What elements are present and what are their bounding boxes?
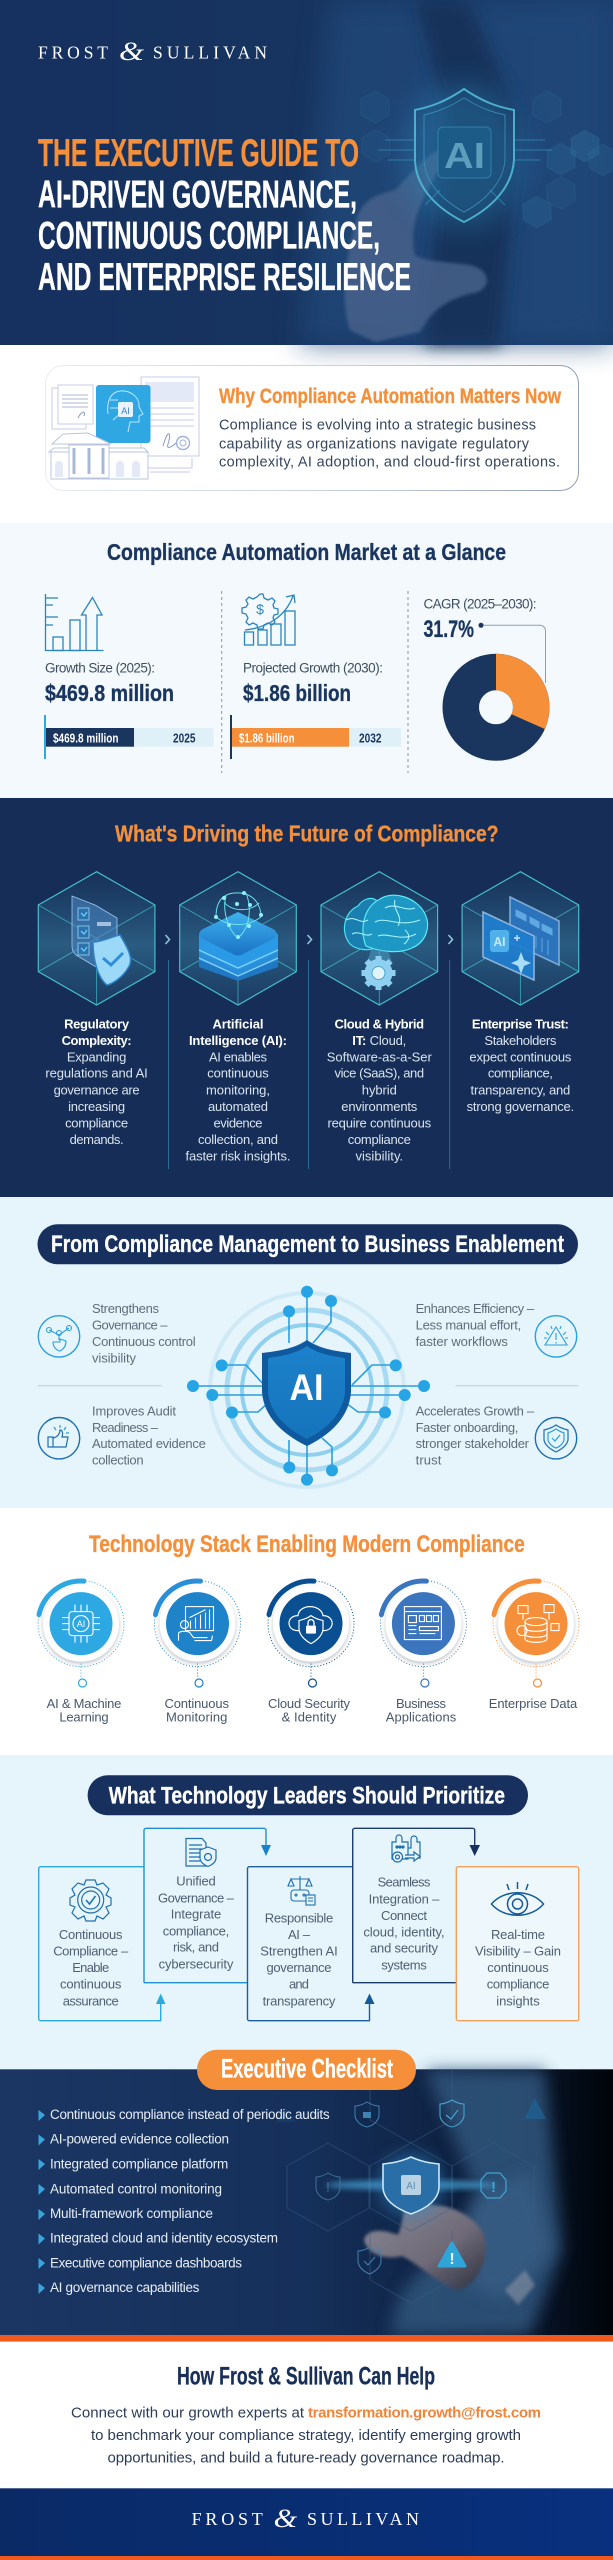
text: accelerates growth <box>416 1403 535 1468</box>
illustration: documents, AI head and building <box>49 377 199 479</box>
pill: executive checklist heading: Executive Checklist <box>221 2053 393 2083</box>
step: seamless integration: Connect <box>381 1908 427 1923</box>
step: unified governance: compliance, <box>163 1923 229 1938</box>
text: strengthens governance <box>92 1301 196 1366</box>
text: enterprise trust: compliance, <box>488 1066 553 1081</box>
central AI shield diagram <box>187 1286 430 1487</box>
photo: executive sleeve and hand with security icons: ! <box>449 2251 455 2268</box>
text: artificial intelligence: evidence <box>214 1115 262 1130</box>
item: business applications <box>380 1581 466 1724</box>
text: regulatory complexity: regulations and AI <box>45 1066 148 1081</box>
bar: 2025 <box>44 715 214 759</box>
panel: market at a glance <box>0 523 613 798</box>
item: AI and machine learning: AI <box>77 1619 85 1629</box>
icon: regulatory complexity cube <box>38 872 155 1005</box>
text: artificial intelligence: continuous <box>207 1066 269 1081</box>
text: artificial intelligence: Artificial <box>212 1016 264 1031</box>
step: responsible AI: governance <box>266 1960 332 1975</box>
panel: drivers of compliance <box>0 798 613 1197</box>
photo: executive sleeve and hand with security icons: ! <box>491 2179 496 2196</box>
arrows between drivers <box>166 935 452 944</box>
footer logo <box>192 2504 419 2533</box>
logo: SULLIVAN <box>153 42 267 62</box>
step: unified governance: Unified <box>176 1874 216 1889</box>
text: regulatory complexity: Regulatory <box>64 1016 130 1031</box>
panel: technology stack <box>0 1508 613 1755</box>
text: cloud and hybrid IT: environments <box>341 1099 418 1114</box>
step: seamless integration: cloud, identity, <box>363 1924 445 1939</box>
item: cloud security and identity: & Identity <box>282 1709 337 1724</box>
text: cloud and hybrid IT <box>327 1016 432 1163</box>
item: enterprise data: Enterprise Data <box>489 1696 578 1711</box>
text: regulatory complexity <box>45 1016 148 1147</box>
heading pill <box>38 1224 578 1264</box>
step: unified governance <box>144 1828 271 1983</box>
heading pill <box>88 1775 528 1815</box>
step: real-time visibility: compliance <box>487 1977 549 1992</box>
text: enhances efficiency: Enhances Efficiency – <box>416 1301 535 1316</box>
text: enterprise trust: transparency, and <box>471 1082 570 1097</box>
icon: document with shield <box>186 1838 216 1866</box>
step: real-time visibility: insights <box>496 1993 540 2008</box>
stat: projected growth: Projected Growth (2030): <box>243 661 383 676</box>
step: continuous compliance <box>39 1867 166 2021</box>
panel: footer <box>0 2488 613 2560</box>
bar: 2025: $469.8 million <box>53 730 119 745</box>
checklist: AI-powered evidence collection <box>50 2132 229 2147</box>
icon: improves audit readiness <box>38 1418 80 1459</box>
checklist: Executive compliance dashboards <box>50 2255 242 2270</box>
item: continuous monitoring <box>154 1581 240 1724</box>
title: CONTINUOUS COMPLIANCE, <box>38 214 380 257</box>
text: improves audit readiness: collection <box>92 1453 144 1468</box>
text: regulatory complexity: Complexity: <box>62 1033 132 1048</box>
text: improves audit readiness: Readiness – <box>92 1420 159 1435</box>
panel: hero banner <box>0 0 613 345</box>
text: artificial intelligence: AI enables <box>209 1050 268 1065</box>
step: responsible AI: Responsible <box>265 1910 333 1925</box>
step: responsible AI: and <box>289 1977 309 1992</box>
icon: AI shield <box>378 83 552 227</box>
stat: CAGR <box>424 597 536 643</box>
step: continuous compliance: Enable <box>72 1960 109 1975</box>
icon: scales and robot <box>288 1876 315 1905</box>
title <box>38 132 411 299</box>
heading: How Frost & Sullivan Can Help <box>177 2362 435 2390</box>
stat: CAGR: CAGR (2025–2030): <box>424 597 536 612</box>
item: AI and machine learning <box>38 1581 124 1724</box>
text: enterprise trust: strong governance. <box>467 1099 574 1114</box>
title: AND ENTERPRISE RESILIENCE <box>38 256 411 299</box>
pill: executive checklist heading <box>197 2050 416 2090</box>
icon: gear with dollar and growth bars: $ <box>256 601 264 617</box>
panel: why compliance automation matters <box>46 366 578 490</box>
icon: enhances efficiency <box>535 1316 577 1357</box>
heading: What's Driving the Future of Compliance? <box>115 821 498 847</box>
contact text: to benchmark your compliance strategy, identify emerging growth <box>91 2427 521 2444</box>
icon: enterprise trust cube <box>462 872 579 1005</box>
stat: growth size <box>45 661 174 706</box>
heading pill: What Technology Leaders Should Prioritize <box>109 1782 505 1809</box>
step: seamless integration: systems <box>381 1957 427 1972</box>
hero photo: blurred executive and hand <box>300 0 613 345</box>
text: strengthens governance: Strengthens <box>92 1301 160 1316</box>
text: cloud and hybrid IT: IT: Cloud, <box>352 1033 406 1048</box>
photo: executive sleeve and hand with security icons <box>276 2070 562 2335</box>
text: enterprise trust: expect continuous <box>469 1050 572 1065</box>
icon: bar chart with arrow up <box>46 594 104 650</box>
text: cloud and hybrid IT: Cloud & Hybrid <box>335 1016 424 1031</box>
text: strengthens governance: visibility <box>92 1350 136 1366</box>
panel: how Frost and Sullivan can help <box>0 2342 613 2488</box>
footer logo: FROST <box>192 2509 263 2529</box>
stat: projected growth: $1.86 billion <box>243 680 351 706</box>
icon: artificial intelligence cube <box>180 872 296 1005</box>
checklist <box>38 2107 330 2295</box>
step: unified governance: risk, and <box>173 1940 219 1955</box>
photo: executive sleeve and hand with security icons: AI <box>406 2181 416 2192</box>
text: enhances efficiency <box>416 1301 535 1349</box>
logo: & <box>119 37 145 66</box>
item: AI and machine learning: Learning <box>59 1709 109 1724</box>
text: strengthens governance: Continuous control <box>92 1334 196 1349</box>
text: regulatory complexity: increasing <box>68 1099 125 1114</box>
stat: growth size: Growth Size (2025): <box>45 661 155 676</box>
step: unified governance: cybersecurity <box>159 1956 234 1971</box>
bar: 2032 <box>230 715 401 759</box>
step: responsible AI <box>248 1867 374 2021</box>
step: continuous compliance: Compliance – <box>53 1943 129 1958</box>
checklist: AI governance capabilities <box>50 2280 200 2295</box>
text: artificial intelligence: faster risk insights. <box>186 1148 290 1163</box>
text: regulatory complexity: Expanding <box>67 1050 126 1065</box>
text: artificial intelligence: Intelligence (AI): <box>189 1033 287 1048</box>
text: improves audit readiness <box>92 1403 206 1468</box>
illustration: documents, AI head and building: AI <box>121 406 130 416</box>
text: accelerates growth: Accelerates Growth – <box>416 1403 535 1418</box>
title: THE EXECUTIVE GUIDE TO <box>38 132 359 175</box>
checklist: Integrated compliance platform <box>50 2156 228 2171</box>
text: improves audit readiness: Automated evidence <box>92 1436 206 1451</box>
contact text: transformation.growth@frost.com <box>308 2404 541 2421</box>
body text: Compliance is evolving into a strategic business <box>219 417 536 433</box>
item: enterprise data <box>489 1581 579 1711</box>
step: seamless integration: Integration – <box>369 1891 440 1906</box>
step: responsible AI: transparency <box>263 1993 336 2008</box>
text: artificial intelligence: monitoring, <box>206 1082 270 1097</box>
item: business applications: Applications <box>386 1709 457 1724</box>
text: regulatory complexity: compliance <box>65 1115 128 1130</box>
checklist: Integrated cloud and identity ecosystem <box>50 2231 278 2246</box>
panel: business enablement <box>0 1197 613 1508</box>
item: continuous monitoring: Continuous <box>164 1696 229 1711</box>
item: cloud security and identity <box>268 1581 354 1724</box>
icon: enterprise trust cube: AI <box>494 934 506 949</box>
body text <box>219 417 560 471</box>
body text: complexity, AI adoption, and cloud-first operations. <box>219 455 560 471</box>
panel: what technology leaders should prioritize <box>0 1755 613 2070</box>
callout connector <box>478 623 546 683</box>
contact text <box>71 2404 541 2467</box>
text: artificial intelligence: automated <box>208 1099 268 1114</box>
icon: strengthens governance <box>38 1316 80 1357</box>
text: cloud and hybrid IT: visibility. <box>355 1148 403 1163</box>
text: cloud and hybrid IT: Software-as-a-Ser <box>327 1050 432 1065</box>
text: enterprise trust: Enterprise Trust: <box>472 1016 569 1031</box>
text: regulatory complexity: governance are <box>54 1082 140 1097</box>
step: continuous compliance: Continuous <box>59 1927 123 1942</box>
contact text: Connect with our growth experts at <box>71 2404 305 2421</box>
footer logo: & <box>274 2504 298 2533</box>
text: accelerates growth: stronger stakeholder <box>416 1436 530 1451</box>
step: real-time visibility: Visibility – Gain <box>475 1943 561 1958</box>
text: enterprise trust: Stakeholders <box>484 1033 557 1048</box>
logo: FROST <box>38 42 108 62</box>
checklist markers <box>38 2110 45 2294</box>
bar: 2025: 2025 <box>173 730 196 745</box>
checklist: Automated control monitoring <box>50 2181 222 2196</box>
item: cloud security and identity: Cloud Security <box>268 1696 350 1711</box>
stat: growth size: $469.8 million <box>45 680 174 706</box>
item: business applications: Business <box>396 1696 446 1711</box>
text: enhances efficiency: faster workflows <box>416 1334 508 1349</box>
step: responsible AI: AI – <box>288 1927 311 1942</box>
stat: CAGR: 31.7% <box>424 616 474 643</box>
icon: puzzle and gear <box>392 1835 420 1862</box>
step: responsible AI: Strengthen AI <box>260 1943 338 1958</box>
icon: gear with dollar and growth bars <box>242 594 295 645</box>
icon: accelerates growth <box>535 1418 577 1459</box>
title: AI-DRIVEN GOVERNANCE, <box>38 173 357 216</box>
text: artificial intelligence <box>186 1016 290 1163</box>
stat: projected growth <box>243 661 383 706</box>
text: artificial intelligence: collection, and <box>198 1132 278 1147</box>
panel: executive checklist <box>0 2050 613 2335</box>
step: seamless integration: Seamless <box>378 1875 431 1890</box>
icon: gear with check <box>70 1880 111 1921</box>
text: enhances efficiency: Less manual effort, <box>416 1317 521 1332</box>
step: seamless integration: and security <box>370 1941 438 1956</box>
text: strengthens governance: Governance – <box>92 1317 168 1332</box>
step: unified governance: Governance – <box>158 1890 235 1905</box>
step: unified governance: Integrate <box>171 1907 221 1922</box>
step: seamless integration <box>353 1828 480 1983</box>
body text: capability as organizations navigate regulatory <box>219 436 530 452</box>
icon: cloud and hybrid IT cube <box>321 872 438 1005</box>
item: AI and machine learning: AI & Machine <box>47 1696 121 1711</box>
text: accelerates growth: trust <box>416 1453 442 1468</box>
text: improves audit readiness: Improves Audit <box>92 1403 176 1418</box>
text: cloud and hybrid IT: compliance <box>348 1132 411 1147</box>
checklist: Multi-framework compliance <box>50 2206 213 2221</box>
bar: 2032: 2032 <box>359 730 382 745</box>
heading: Compliance Automation Market at a Glance <box>107 539 506 565</box>
text: enterprise trust <box>467 1016 574 1114</box>
step: continuous compliance: assurance <box>63 1993 119 2008</box>
step: real-time visibility <box>456 1867 579 2021</box>
hero hexagon network icons <box>361 91 613 228</box>
text: accelerates growth: Faster onboarding, <box>416 1420 518 1435</box>
step: real-time visibility: continuous <box>487 1960 549 1975</box>
text: cloud and hybrid IT: require continuous <box>328 1115 432 1130</box>
icon: AI shield: AI <box>444 135 485 176</box>
icon: eye <box>492 1882 544 1915</box>
bar: 2032: $1.86 billion <box>239 730 295 745</box>
step: continuous compliance: continuous <box>60 1977 122 1992</box>
step: real-time visibility: Real-time <box>491 1927 545 1942</box>
item: continuous monitoring: Monitoring <box>166 1709 227 1724</box>
photo: executive sleeve and hand with security icons: ! <box>326 2179 330 2195</box>
logo <box>38 37 267 66</box>
central AI shield diagram: AI <box>290 1367 324 1408</box>
text: cloud and hybrid IT: hybrid <box>362 1082 397 1097</box>
text: regulatory complexity: demands. <box>70 1132 124 1147</box>
footer logo: SULLIVAN <box>307 2509 419 2529</box>
checklist: Continuous compliance instead of periodic audits <box>50 2107 330 2122</box>
donut chart <box>461 654 549 743</box>
text: cloud and hybrid IT: vice (SaaS), and <box>335 1066 424 1081</box>
contact text: opportunities, and build a future-ready governance roadmap. <box>108 2450 504 2467</box>
